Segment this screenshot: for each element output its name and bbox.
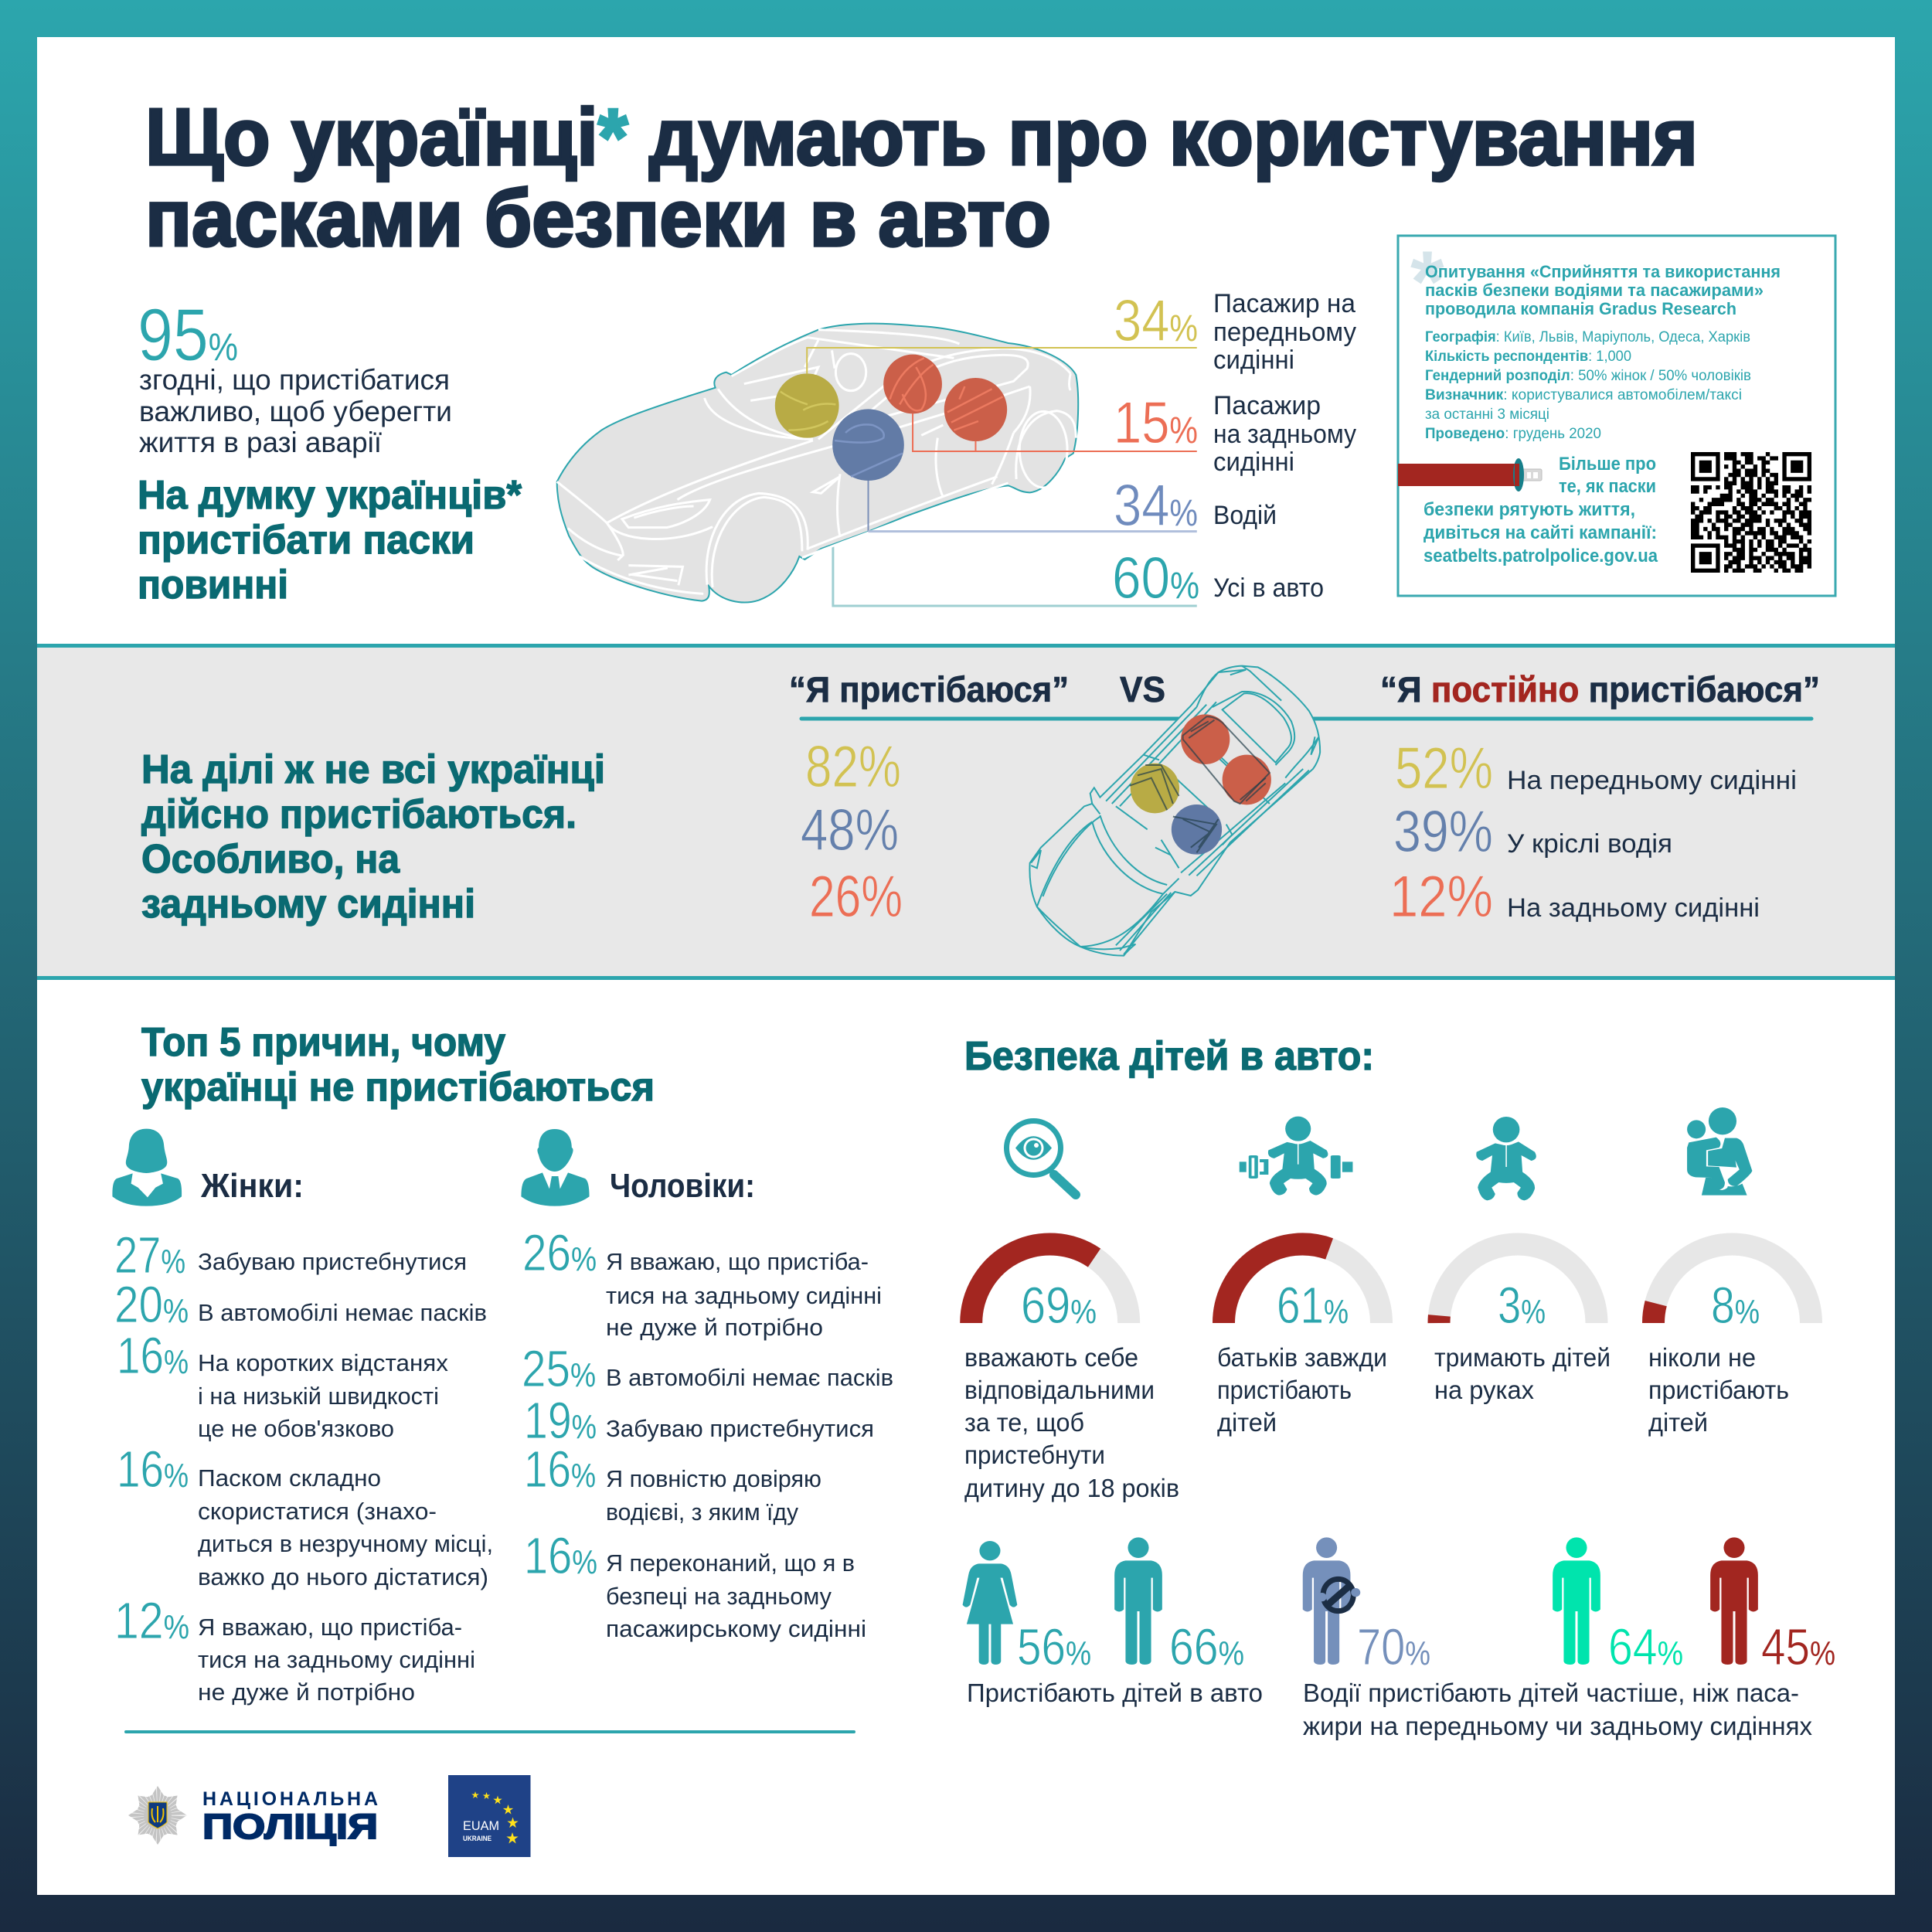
caption: 69%: вважають себе <box>964 1343 1138 1372</box>
stats: I buckle up: 26% <box>809 864 903 930</box>
heading: I buckle up vs: “Я постійно пристібаюся” <box>1380 669 1820 709</box>
text: 95% description: згодні, що пристібатися <box>139 364 450 396</box>
caption: buckle children: Пристібають дітей в авто <box>967 1679 1263 1707</box>
icon: baby <box>1476 1117 1536 1200</box>
list: men reasons: не дуже й потрібно <box>606 1314 823 1341</box>
survey details: Проведено: грудень 2020 <box>1425 426 1601 442</box>
heading: child safety: Безпека дітей в авто: <box>964 1034 1374 1079</box>
panel: top 5 reasons <box>112 1020 893 1706</box>
caption: 61% <box>1217 1343 1387 1437</box>
icon: magnifier with eye <box>1006 1121 1076 1195</box>
text: 95% description: життя в разі аварії <box>139 427 382 458</box>
heading: top 5 reasons: Топ 5 причин, чому <box>141 1020 505 1065</box>
list: women reasons: 20% <box>114 1276 189 1334</box>
list: women reasons <box>114 1226 493 1706</box>
label: rear passenger <box>1213 391 1356 477</box>
logo: EUAM Ukraine: UKRAINE <box>463 1835 492 1843</box>
icon: parent holding child <box>1687 1107 1752 1196</box>
list: men reasons <box>522 1224 893 1642</box>
text: 95% description: важливо, щоб уберегти <box>139 396 452 427</box>
heading: top 5 reasons: українці не пристібаються <box>141 1065 655 1110</box>
title <box>145 93 1698 264</box>
car white detail lines <box>557 330 1076 594</box>
list: women reasons: 16% <box>117 1440 189 1498</box>
icon: woman <box>112 1129 182 1206</box>
gauge: 3%: 3% <box>1498 1277 1546 1335</box>
label: driver: Водій <box>1213 501 1277 530</box>
heading: top 5 reasons <box>141 1020 655 1110</box>
stat: 45%: 45% <box>1761 1618 1835 1676</box>
list: men reasons: 16% <box>524 1527 597 1585</box>
panel: child safety <box>963 1034 1835 1740</box>
gauge: 8% <box>1654 1244 1811 1335</box>
list: men reasons: Забуваю пристебнутися <box>606 1415 874 1442</box>
stat: everyone: 60% <box>1112 546 1199 611</box>
stats: I buckle up: 48% <box>801 798 899 863</box>
list: men reasons: 26% <box>522 1224 597 1282</box>
call to action text: те, як паски <box>1559 476 1656 497</box>
caption: 61%: батьків завжди <box>1217 1343 1387 1372</box>
heading: I buckle up vs: “Я пристібаюся” <box>789 669 1069 709</box>
caption: drivers vs passengers <box>1303 1679 1812 1740</box>
title: Що українці* думають про користування <box>145 93 1698 182</box>
caption: 69%: пристебнути <box>964 1440 1105 1469</box>
caption: 69%: дитину до 18 років <box>964 1474 1179 1502</box>
survey details: за останні 3 місяці <box>1425 406 1549 423</box>
car illustration: top view <box>1029 666 1320 956</box>
title: пасками безпеки в авто <box>145 174 1051 264</box>
list: women reasons: і на низькій швидкості <box>198 1383 439 1410</box>
stats: I always buckle up: 39% <box>1393 799 1493 865</box>
list: men reasons: 19% <box>524 1392 597 1450</box>
call to action text: seatbelts.patrolpolice.gov.ua <box>1423 546 1658 566</box>
logo text <box>202 1788 378 1846</box>
caption: drivers vs passengers: жири на передньому чи задньому сидіннях <box>1303 1712 1812 1740</box>
seat: front passenger <box>1131 764 1179 813</box>
gauge: 69%: 69% <box>1021 1277 1097 1335</box>
survey details: Визначник: користувалися автомобілем/таксі <box>1425 387 1742 403</box>
heading: I buckle up vs <box>789 669 1820 709</box>
stat: rear passenger: 15% <box>1114 390 1198 456</box>
caption: 8%: дітей <box>1648 1408 1708 1437</box>
caption: 3%: на руках <box>1434 1376 1534 1404</box>
section rule <box>126 1730 854 1733</box>
list: men reasons: Я повністю довіряю <box>606 1465 821 1492</box>
seat: driver <box>832 409 904 481</box>
list: women reasons: важко до нього дістатися) <box>198 1563 488 1590</box>
list: men reasons: В автомобілі немає пасків <box>606 1364 893 1391</box>
icon: seat belt <box>1398 458 1542 492</box>
list: men reasons: Я переконаний, що я в <box>606 1549 855 1577</box>
caption: 8% <box>1648 1343 1789 1437</box>
label: front passenger <box>1213 289 1356 375</box>
list: women reasons: 27% <box>114 1226 185 1284</box>
panel: comparison band <box>37 644 1895 980</box>
car body <box>557 324 1078 602</box>
label: front passenger: сидінні <box>1213 345 1294 375</box>
stats: I buckle up <box>801 734 903 930</box>
list: women reasons: 16% <box>117 1327 189 1385</box>
heading: who should buckle up: На думку українців* <box>138 473 522 518</box>
car illustration: side view with seats <box>557 324 1197 606</box>
label: everyone: Усі в авто <box>1213 573 1324 603</box>
seat labels: На задньому сидінні <box>1507 893 1760 923</box>
panel: survey info box <box>1398 233 1835 596</box>
call to action text <box>1423 454 1658 566</box>
caption: 8%: ніколи не <box>1648 1343 1756 1372</box>
label: rear passenger: на задньому <box>1213 420 1356 449</box>
heading: not everyone buckles up: На ділі ж не всі українці <box>141 747 605 792</box>
list: women reasons: Паском складно <box>198 1464 381 1492</box>
stats: I buckle up: 82% <box>805 734 901 800</box>
caption: 8%: пристібають <box>1648 1376 1789 1404</box>
logo text: НАЦІОНАЛЬНА <box>202 1788 378 1810</box>
seat: rear passenger 1 <box>883 355 942 413</box>
seat: rear left <box>1181 714 1230 764</box>
survey title: проводила компанія Gradus Research <box>1425 299 1736 318</box>
label: front passenger: передньому <box>1213 318 1356 347</box>
heading: not everyone buckles up: дійсно пристібаються. <box>141 792 577 837</box>
seat labels: У кріслі водія <box>1507 829 1672 859</box>
survey title: пасків безпеки водіями та пасажирами» <box>1425 281 1764 300</box>
caption: 61%: пристібають <box>1217 1376 1352 1404</box>
caption: 69%: відповідальними <box>964 1376 1155 1404</box>
text: 95% description <box>139 364 452 458</box>
call to action text: дивіться на сайті кампанії: <box>1423 522 1657 543</box>
stat: 66%: 66% <box>1169 1618 1244 1676</box>
heading rule <box>801 717 1811 720</box>
stats: I always buckle up <box>1389 736 1493 930</box>
call to action text: безпеки рятують життя, <box>1423 499 1635 520</box>
callout line: everyone <box>833 546 1197 606</box>
stat: 95%: 95% <box>138 294 238 376</box>
label: front passenger: Пасажир на <box>1213 289 1355 318</box>
list: women reasons: 12% <box>114 1592 189 1650</box>
panel: opinions per seat <box>1112 288 1356 611</box>
icon: driver figure with wheel <box>1303 1537 1360 1665</box>
callout connector lines <box>807 348 1197 532</box>
stat: 56%: 56% <box>1017 1618 1091 1676</box>
logo: National Police <box>128 1786 378 1846</box>
stat: front passenger: 34% <box>1114 288 1198 354</box>
logo: EUAM Ukraine: EUAM <box>463 1818 499 1833</box>
caption: 3%: тримають дітей <box>1434 1343 1611 1372</box>
list: women reasons: Забуваю пристебнутися <box>198 1248 467 1275</box>
caption: 69% <box>964 1343 1179 1502</box>
heading: not everyone buckles up: Особливо, на <box>141 837 400 882</box>
stat: 70%: 70% <box>1357 1618 1430 1676</box>
heading: women: Жінки: <box>200 1167 304 1205</box>
heading: men: Чоловіки: <box>610 1167 755 1205</box>
caption: drivers vs passengers: Водії пристібають дітей частіше, ніж паса- <box>1303 1679 1799 1707</box>
seat: driver <box>1172 804 1222 855</box>
caption: 61%: дітей <box>1217 1408 1277 1437</box>
list: men reasons: безпеці на задньому <box>606 1583 832 1610</box>
caption: 69%: за те, щоб <box>964 1408 1084 1437</box>
gauge: 61%: 61% <box>1277 1277 1349 1335</box>
survey title <box>1425 262 1781 318</box>
caption: 3% <box>1434 1343 1611 1404</box>
survey details <box>1425 329 1751 442</box>
icon: police star <box>128 1786 187 1845</box>
seat labels <box>1507 766 1797 923</box>
logo: EUAM Ukraine <box>448 1775 530 1857</box>
gauge: 3% <box>1439 1244 1597 1335</box>
list: men reasons: Я вважаю, що пристіба- <box>606 1248 869 1275</box>
heading: not everyone buckles up: задньому сидінні <box>141 882 475 927</box>
list: men reasons: водієві, з яким їду <box>606 1498 798 1526</box>
list: women reasons: скористатися (знахо- <box>198 1498 437 1525</box>
icon: green figure <box>1553 1537 1600 1665</box>
call to action text: Більше про <box>1559 454 1656 474</box>
survey details: Кількість респондентів: 1,000 <box>1425 349 1631 365</box>
heading: who should buckle up: повинні <box>138 563 288 607</box>
label: rear passenger: Пасажир <box>1213 391 1321 420</box>
stat: driver: 34% <box>1114 473 1198 539</box>
seat outlines <box>1130 716 1270 852</box>
heading: who should buckle up: пристібати паски <box>138 518 474 563</box>
icon: baby with belt <box>1240 1117 1352 1196</box>
survey title: Опитування «Сприйняття та використання <box>1425 262 1781 281</box>
icon: decorative asterisk: * <box>1410 233 1444 330</box>
seat: rear passenger 2 <box>944 378 1007 441</box>
gauge: 8%: 8% <box>1711 1277 1760 1335</box>
survey details: Географія: Київ, Львів, Маріуполь, Одеса, Харків <box>1425 329 1750 345</box>
list: women reasons: В автомобілі немає пасків <box>198 1299 487 1326</box>
list: women reasons: Я вважаю, що пристіба- <box>198 1614 462 1641</box>
icon: red figure <box>1710 1537 1758 1665</box>
heading: not everyone buckles up <box>141 747 605 927</box>
seat labels: На передньому сидінні <box>1507 766 1797 795</box>
icon: man <box>521 1129 590 1206</box>
seat: rear right <box>1223 755 1271 804</box>
label: rear passenger: сидінні <box>1213 447 1294 477</box>
list: women reasons: диться в незручному місці, <box>198 1530 493 1557</box>
gauge: 61% <box>1224 1244 1382 1335</box>
list: men reasons: тися на задньому сидінні <box>606 1282 882 1309</box>
heading: who should buckle up <box>138 473 522 607</box>
list: men reasons: пасажирському сидінні <box>606 1615 866 1642</box>
heading: I buckle up vs: VS <box>1120 669 1165 709</box>
seat: front passenger <box>775 373 839 438</box>
icon: woman figure 56% <box>963 1541 1017 1665</box>
list: women reasons: не дуже й потрібно <box>198 1679 415 1706</box>
QR code <box>1691 454 1811 570</box>
stat: 64%: 64% <box>1608 1618 1683 1676</box>
list: men reasons: 25% <box>522 1340 596 1398</box>
list: women reasons: це не обов'язково <box>198 1415 394 1442</box>
stats: I always buckle up: 52% <box>1395 736 1493 801</box>
panel: overall opinion <box>138 294 522 607</box>
stats: I always buckle up: 12% <box>1389 864 1493 930</box>
list: women reasons: На коротких відстанях <box>198 1349 449 1376</box>
list: women reasons: тися на задньому сидінні <box>198 1646 475 1673</box>
survey details: Гендерний розподіл: 50% жінок / 50% чоловіків <box>1425 368 1751 384</box>
logo text: ПОЛІЦІЯ <box>202 1807 378 1846</box>
icon: man figure 66% <box>1114 1537 1162 1665</box>
list: men reasons: 16% <box>524 1440 596 1498</box>
gauge: 69% <box>971 1244 1129 1335</box>
